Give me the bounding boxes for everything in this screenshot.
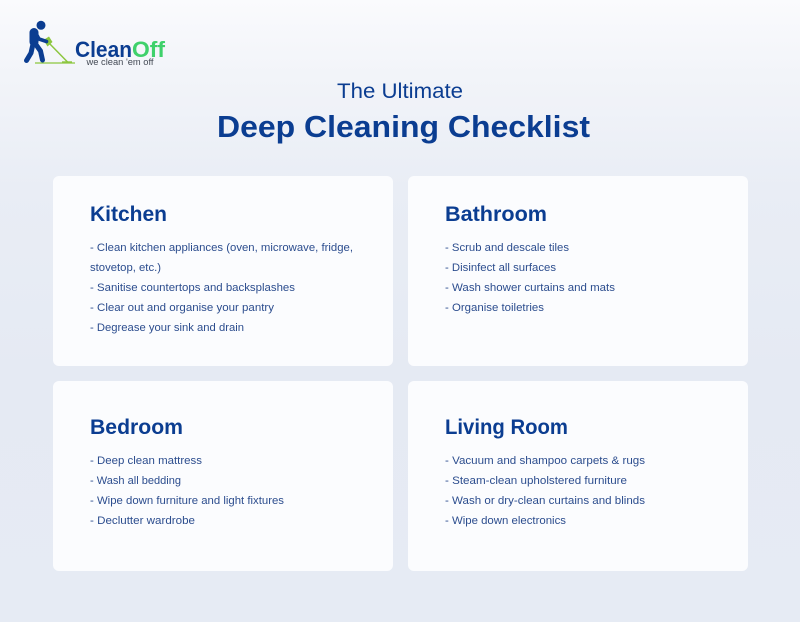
list: living room tasks: - Steam-clean upholstered furniture (445, 475, 627, 487)
list: bathroom tasks: - Scrub and descale tiles (445, 242, 570, 254)
list: living room tasks: - Wash or dry-clean curtains and blinds (445, 495, 646, 507)
panel: bedroom (53, 381, 393, 571)
list: bedroom tasks: - Wipe down furniture and light fixtures (90, 495, 285, 507)
panel: living room (408, 381, 748, 571)
list: living room tasks (445, 455, 646, 527)
list: kitchen tasks: - Sanitise countertops and backsplashes (90, 282, 296, 294)
icon: person mopping (26, 21, 75, 63)
panel: kitchen (53, 176, 393, 366)
list: bedroom tasks (90, 455, 285, 527)
title line 2: Deep Cleaning Checklist (217, 109, 590, 144)
logo: CleanOff (26, 21, 166, 67)
list: kitchen tasks: stovetop, etc.) (90, 262, 161, 274)
list: bedroom tasks: - Deep clean mattress (90, 455, 203, 467)
list: bedroom tasks: - Declutter wardrobe (90, 515, 195, 527)
list: bathroom tasks: - Disinfect all surfaces (445, 262, 557, 274)
panel: bathroom (408, 176, 748, 366)
heading: kitchen: Kitchen (90, 203, 167, 226)
list: kitchen tasks: - Clear out and organise your pantry (90, 302, 275, 314)
list: kitchen tasks (90, 242, 353, 334)
list: bathroom tasks: - Organise toiletries (445, 302, 545, 314)
list: living room tasks: - Wipe down electronics (445, 515, 567, 527)
list: kitchen tasks: - Degrease your sink and drain (90, 322, 244, 334)
logo wordmark: Clean (75, 37, 132, 62)
title line 1: The Ultimate (337, 80, 463, 103)
list: bathroom tasks (445, 242, 616, 314)
list: bathroom tasks: - Wash shower curtains and mats (445, 282, 616, 294)
logo wordmark accent: Off (132, 37, 166, 62)
list: kitchen tasks: - Clean kitchen appliances (oven, microwave, fridge, (90, 242, 353, 254)
heading: bathroom: Bathroom (445, 203, 547, 226)
list: bedroom tasks: - Wash all bedding (90, 475, 181, 487)
list: living room tasks: - Vacuum and shampoo carpets & rugs (445, 455, 646, 467)
logo tagline: we clean 'em off (85, 57, 154, 67)
heading: living room: Living Room (445, 416, 568, 439)
title (217, 80, 590, 144)
heading: bedroom: Bedroom (90, 416, 183, 439)
